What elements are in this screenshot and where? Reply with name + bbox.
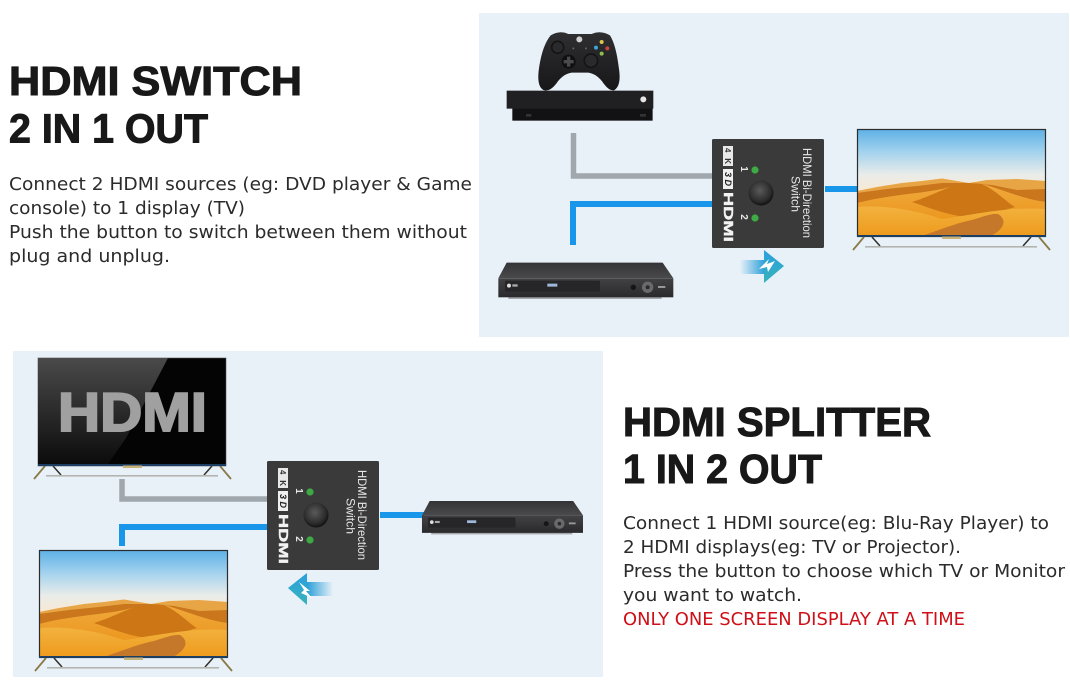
icon: TV with desert picture: [853, 129, 1050, 250]
icon: HDMI switch box: 4K: [723, 148, 732, 164]
text block: switch description: Push the button to switch between them without: [9, 222, 467, 243]
icon: HDMI switch box: 2: [738, 214, 749, 220]
heading: HDMI splitter: [623, 399, 931, 492]
arrow: signal direction left: [288, 573, 333, 605]
text block: switch description: [9, 174, 472, 267]
icon: HDMI splitter box: HDMI: [276, 514, 291, 564]
text block: splitter description: ONLY ONE SCREEN DISPLAY AT A TIME: [623, 609, 965, 630]
connector: blue cable from switch to TV: [825, 186, 858, 192]
connector: grey cable from console to switch: [574, 133, 712, 176]
text block: splitter description: Connect 1 HDMI source(eg: Blu-Ray Player) to: [623, 513, 1049, 534]
connector: blue cable from Blu-ray player to splitter: [380, 512, 424, 518]
icon: game console: [507, 91, 653, 121]
text block: splitter description: 2 HDMI displays(eg: TV or Projector).: [623, 537, 961, 558]
text block: splitter description: [623, 513, 1066, 630]
text block: switch description: plug and unplug.: [9, 246, 170, 267]
panel: splitter diagram background: [13, 351, 603, 677]
heading: HDMI switch: [9, 58, 302, 152]
text block: splitter description: you want to watch.: [623, 585, 802, 606]
icon: Blu-ray player, source: [422, 501, 583, 534]
arrow: signal direction right: [740, 250, 784, 283]
heading: HDMI switch: HDMI SWITCH: [9, 58, 302, 104]
icon: Blu-ray player: [498, 263, 673, 299]
text block: splitter description: Press the button to choose which TV or Monitor: [623, 561, 1066, 582]
icon: HDMI switch box: HDMI: [721, 192, 736, 242]
icon: TV showing HDMI logo: [34, 358, 231, 479]
icon: HDMI switch box: Switch: [788, 176, 802, 212]
icon: HDMI switch box: HDMI Bi-Direction: [800, 148, 814, 238]
connector: grey cable from splitter to top TV: [122, 479, 267, 499]
connector: blue cable from Blu-ray player to switch: [573, 204, 712, 245]
icon: HDMI splitter box: 3D: [278, 494, 288, 508]
heading: HDMI splitter: 1 IN 2 OUT: [623, 446, 822, 492]
icon: HDMI switch box: [712, 139, 824, 248]
icon: HDMI splitter box: 2: [293, 536, 304, 542]
icon: HDMI switch box: 3D: [723, 172, 733, 186]
icon: HDMI splitter box: Switch: [344, 498, 358, 534]
icon: HDMI splitter box: HDMI Bi-Direction: [355, 470, 369, 560]
heading: HDMI switch: 2 IN 1 OUT: [9, 106, 208, 152]
icon: TV with desert picture, bottom: [35, 550, 232, 671]
text block: switch description: Connect 2 HDMI sources (eg: DVD player & Game: [9, 174, 472, 195]
icon: game controller: [538, 32, 620, 91]
text block: switch description: console) to 1 display (TV): [9, 198, 245, 219]
connector: blue cable from splitter to bottom TV: [122, 527, 267, 546]
icon: HDMI splitter box: [267, 461, 379, 570]
heading: HDMI splitter: HDMI SPLITTER: [623, 399, 931, 445]
icon: TV showing HDMI logo: HDMI: [58, 381, 207, 443]
icon: HDMI splitter box: 1: [293, 488, 304, 494]
icon: HDMI splitter box: 4K: [278, 470, 287, 486]
icon: HDMI switch box: 1: [738, 166, 749, 172]
panel: switch diagram background: [479, 13, 1069, 337]
